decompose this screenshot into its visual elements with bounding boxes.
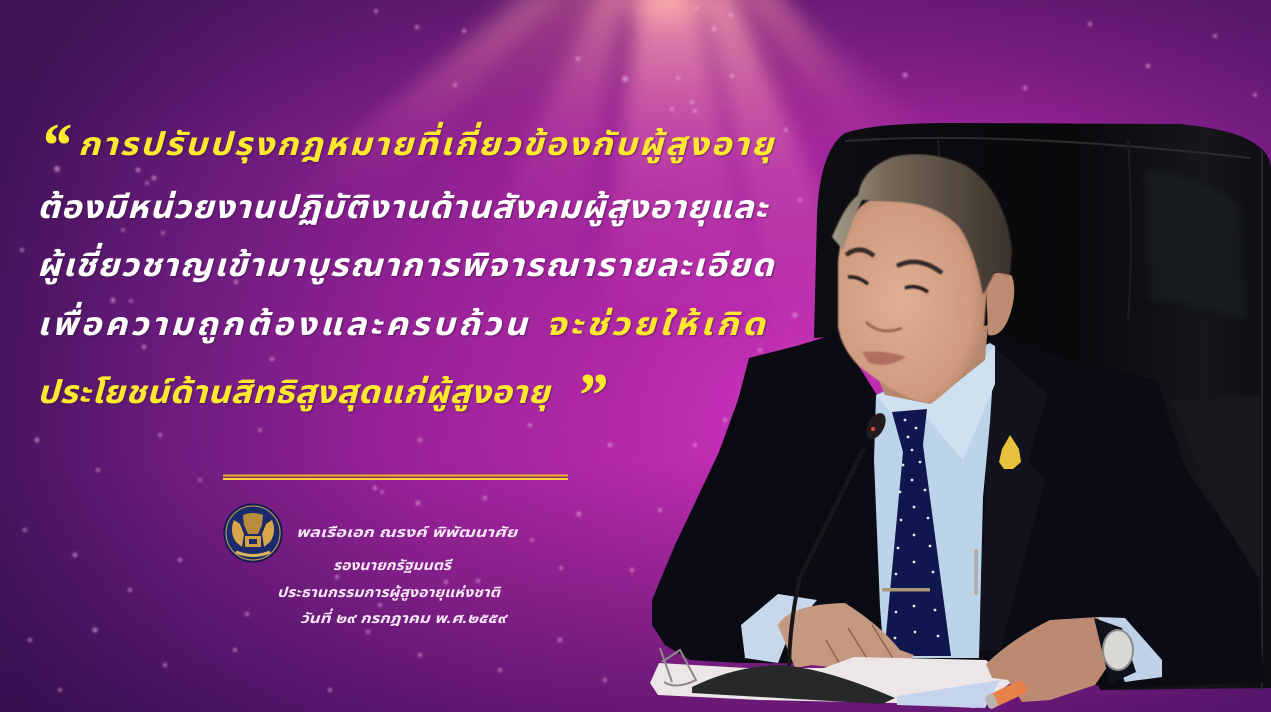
tie [884, 409, 951, 656]
light rays from top [260, 0, 1000, 380]
quote line 2: ต้องมีหน่วยงานปฏิบัติงานด้านสังคมผู้สูงอายุและ [37, 189, 770, 227]
blue document pages [897, 680, 1000, 708]
documents [650, 657, 1012, 708]
orange marker [984, 679, 1028, 710]
photo: man at microphone [650, 123, 1271, 710]
name: พลเรือเอก ณรงค์ พิพัฒนาศัย [296, 524, 519, 540]
wrist watch [1094, 618, 1136, 684]
leather chair [814, 123, 1271, 690]
suit [652, 328, 1264, 688]
hair [832, 154, 1012, 295]
glasses [660, 648, 696, 686]
head [832, 154, 1014, 404]
mouth [862, 352, 906, 365]
position: รองนายกรัฐมนตรี [333, 557, 453, 573]
closing quote mark: ” [576, 362, 607, 430]
quote line 1: การปรับปรุงกฎหมายที่เกี่ยวข้องกับผู้สูงอายุ [78, 121, 776, 164]
eyebrows [846, 250, 942, 273]
eyes [848, 277, 928, 292]
left cuff [741, 594, 817, 663]
quote line 4 yellow part: จะช่วยให้เกิด [546, 306, 768, 342]
tie clip [882, 588, 930, 592]
quote line 4 white part: เพื่อความถูกต้องและครบถ้วน [37, 301, 530, 344]
nose [866, 322, 902, 331]
date: วันที่ ๒๙ กรกฎาคม พ.ศ.๒๕๕๙ [300, 608, 509, 626]
right cuff [1098, 617, 1162, 682]
right hand [986, 617, 1112, 702]
icon: gold lapel pin [999, 435, 1021, 469]
left hand [778, 603, 914, 668]
quote line 3: ผู้เชี่ยวชาญเข้ามาบูรณาการพิจารณารายละเอียด [37, 242, 775, 285]
shirt [874, 343, 995, 658]
attribution text [277, 524, 519, 626]
opening quote mark: “ [40, 112, 71, 180]
quote text [37, 112, 776, 430]
divider double line [223, 474, 568, 480]
neck [870, 325, 988, 404]
ear [986, 272, 1014, 335]
pen [974, 549, 978, 595]
face [838, 200, 987, 403]
collar [876, 346, 995, 460]
chair role: ประธานกรรมการผู้สูงอายุแห่งชาติ [277, 584, 502, 601]
microphone [692, 410, 895, 704]
finger lines [826, 625, 894, 668]
quote line 5: ประโยชน์ด้านสิทธิสูงสุดแก่ผู้สูงอายุ [37, 374, 553, 412]
lapel shading [978, 345, 1048, 650]
icon: government seal [224, 504, 282, 562]
